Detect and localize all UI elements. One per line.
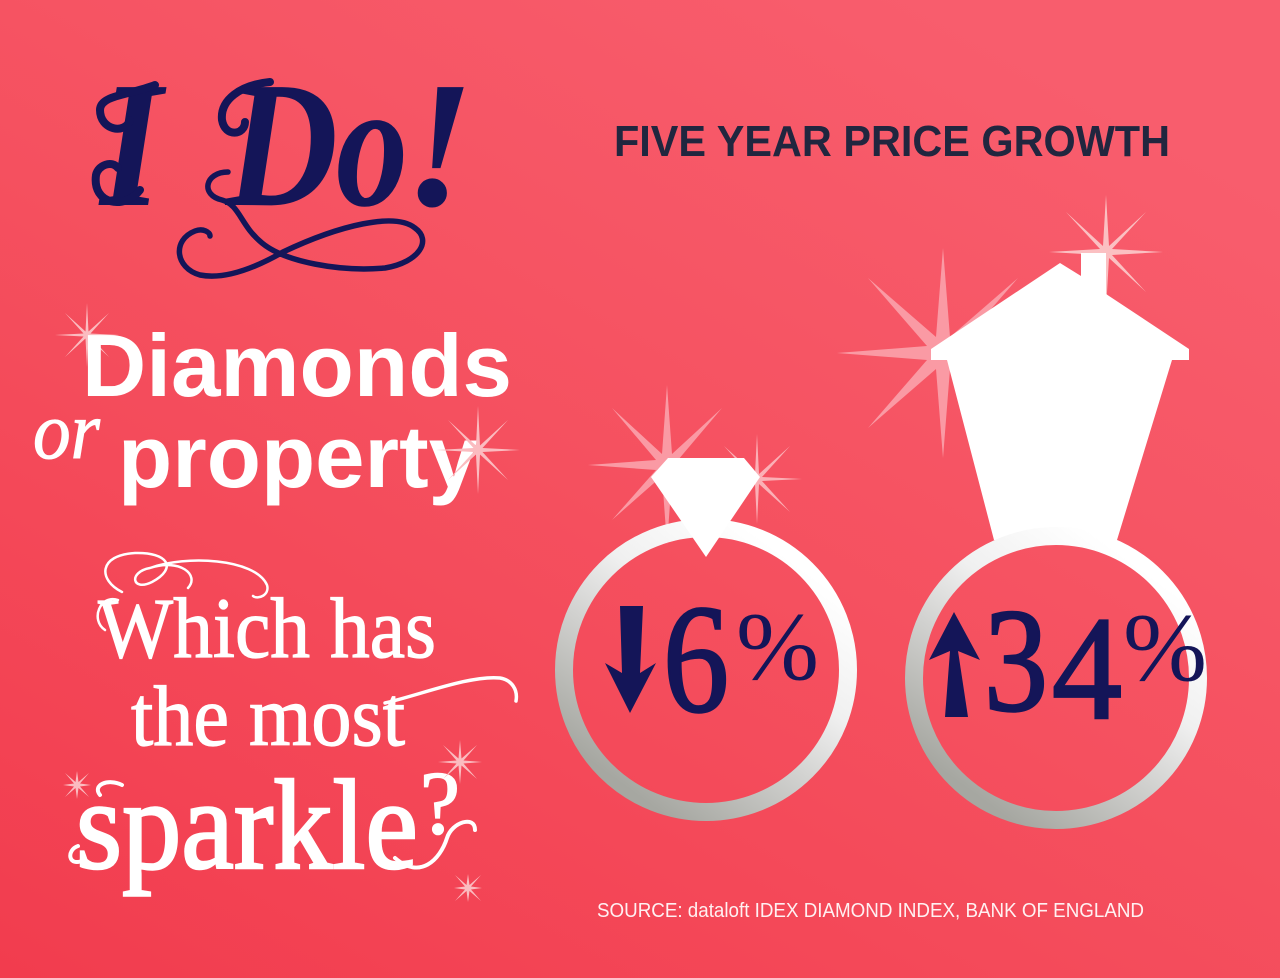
value: 34: 4 (1052, 587, 1122, 751)
diamond (651, 458, 760, 557)
small sparkles around the left text (63, 740, 482, 902)
ring band (914, 536, 1198, 820)
value: 34 (984, 579, 1122, 751)
heading: property: property (118, 407, 478, 506)
word: or: or (33, 385, 101, 476)
sparkle on property (436, 406, 520, 494)
sparkles behind house (837, 195, 1163, 458)
heading: Which has: Which has (98, 580, 436, 676)
heading: I Do!: I (98, 45, 167, 244)
heading: Diamonds: Diamonds (82, 316, 512, 415)
heading: I Do! (96, 45, 474, 276)
sparkle behind Diamonds (55, 303, 119, 367)
title: five year price growth: FIVE YEAR PRICE GROWTH (614, 117, 1170, 166)
ring band (564, 528, 848, 812)
percent sign: % (1123, 594, 1207, 702)
heading: sparkle?: sparkle (76, 754, 418, 896)
diamond ring (564, 385, 848, 812)
value: 34: 3 (984, 579, 1048, 743)
percent sign: % (736, 593, 819, 701)
value: 6: 6 (663, 573, 729, 745)
sparkles behind diamond (588, 385, 802, 545)
heading: the most: the most (131, 668, 405, 764)
source: SOURCE: dataloft IDEX DIAMOND INDEX, BANK OF ENGLAND (597, 900, 1144, 922)
up arrow (929, 612, 980, 717)
heading: I Do!: ! (404, 45, 474, 244)
property ring (837, 195, 1207, 820)
heading: sparkle?: ? (420, 754, 460, 853)
heading: I Do!: o (336, 45, 408, 244)
down arrow (605, 606, 656, 713)
heading: I Do!: D (224, 45, 338, 244)
house (931, 253, 1189, 540)
